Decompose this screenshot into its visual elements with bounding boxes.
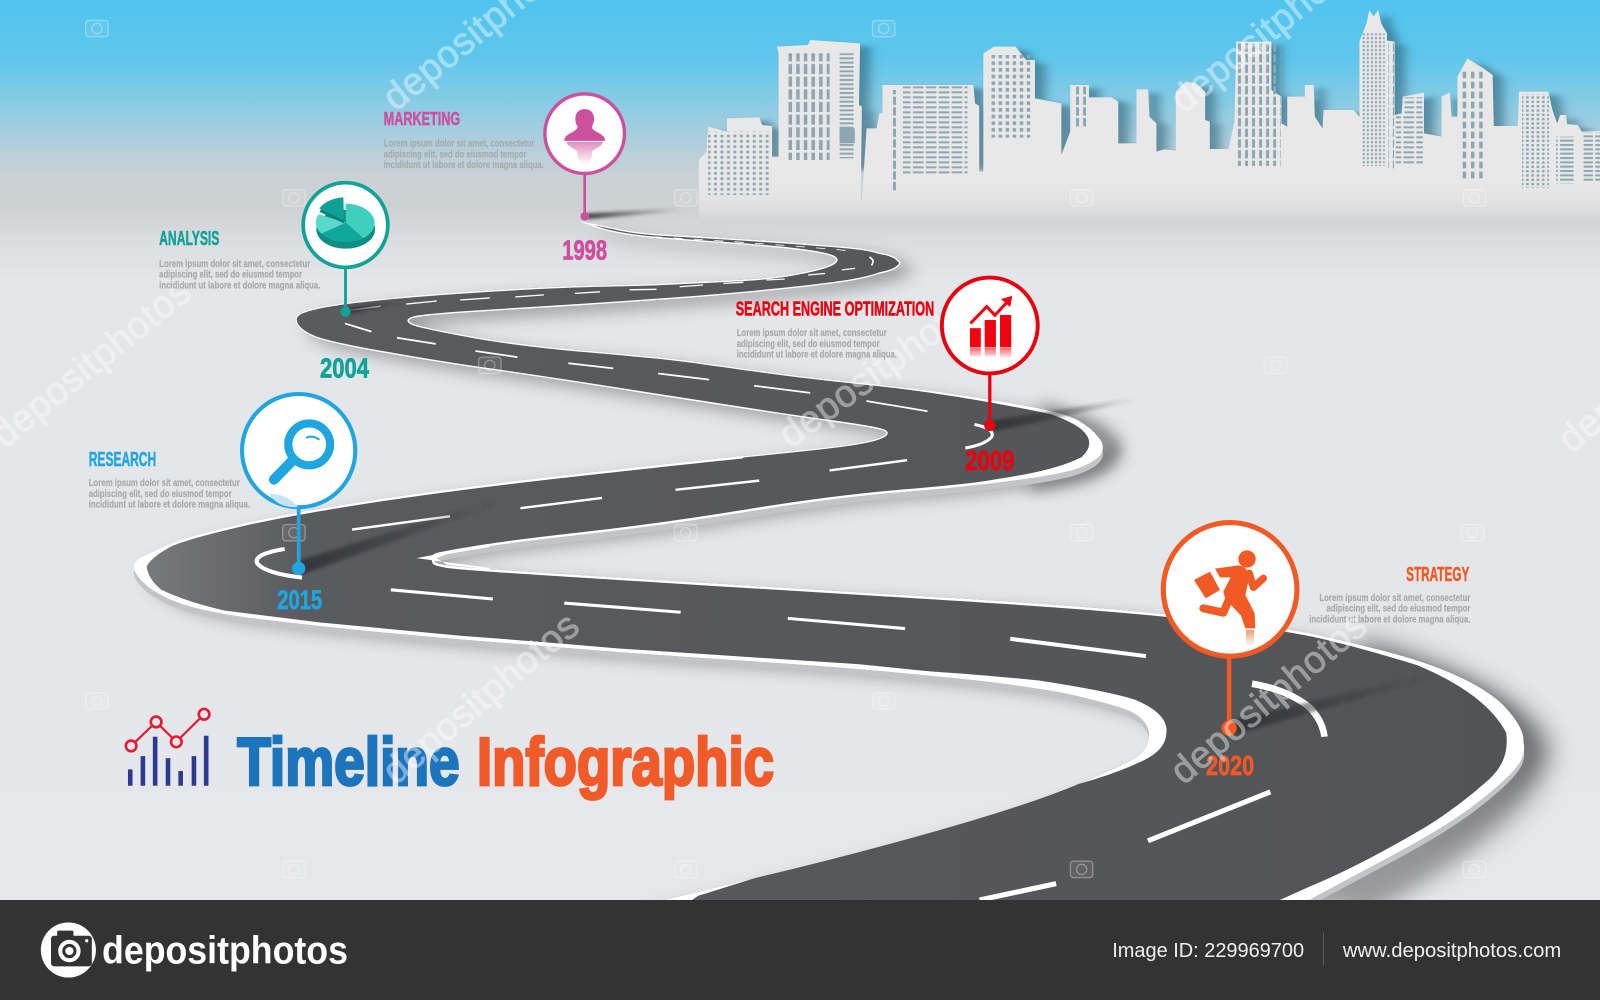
year: 2004 [320,353,370,384]
heading: SEARCH ENGINE OPTIMIZATION [736,299,934,321]
road white edge lines [102,221,1592,918]
watermark over title: depositphotos [374,603,587,792]
body text: adipiscing elit, sed do eiusmod tempor [89,489,232,500]
milestone: Research 2015 [89,394,355,615]
body text: incididunt ut labore et dolore magna aliqua. [737,350,897,361]
body text [89,478,250,511]
body text: adipiscing elit, sed do eiusmod tempor [384,150,527,161]
body text: adipiscing elit, sed do eiusmod tempor [737,339,880,350]
watermarks: depositphotos [771,279,992,455]
body text [1309,593,1471,625]
body text: incididunt ut labore et dolore magna aliqua. [1309,614,1471,625]
watermark over road bend: depositphotos [1162,603,1375,792]
body text: incididunt ut labore et dolore magna aliqua. [159,280,321,291]
heading: ANALYSIS [159,228,219,250]
body text: incididunt ut labore et dolore magna aliqua. [89,500,250,511]
title text: Timeline [237,725,460,800]
skyline silhouette [699,10,1600,223]
year: 2015 [277,585,322,615]
winding road [102,221,1592,918]
year: 2009 [965,445,1014,476]
logo wordmark: depositphotos [102,929,348,972]
year: 2020 [1206,750,1254,781]
road side wall [134,451,1524,900]
milestone: Search Engine Optimization 2009 [736,278,1038,476]
pin [942,278,1038,431]
footer bar [0,900,1600,1000]
milestone: Analysis 2004 [159,183,388,384]
white crescent: far left bend [134,534,266,620]
year: 1998 [562,235,607,266]
icon: 3D pie chart [316,197,375,249]
white crescent: far right bend [1280,630,1524,900]
milestone: Strategy 2020 [1163,523,1471,781]
city skyline [699,10,1600,223]
body text: adipiscing elit, sed do eiusmod tempor [159,270,302,281]
icon: bars and trend line [126,709,209,786]
title text: Infographic [477,725,774,800]
title block [126,709,774,800]
road shadow [146,228,1539,917]
skyline windows [708,33,1600,195]
camera watermark icons [86,20,1486,878]
heading: STRATEGY [1406,564,1470,586]
image id: Image ID: 229969700 [1112,940,1304,962]
body text: adipiscing elit, sed do eiusmod tempor [1327,604,1470,615]
icon: rising bar chart [967,296,1013,359]
icon: running businessman [1194,550,1263,646]
milestone: Marketing 1998 [384,94,624,266]
body text: incididunt ut labore et dolore magna aliqua. [384,160,544,171]
icon: magnifying glass [269,423,330,507]
divider [1323,933,1324,965]
body text [737,328,897,361]
watermarks [0,0,1600,460]
white crescent: right hairpin [900,388,1103,491]
pin [1163,523,1297,736]
heading: RESEARCH [89,449,156,471]
pin [242,394,355,575]
pin [545,94,624,221]
website: www.depositphotos.com [1342,940,1561,962]
body text: Lorem ipsum dolor sit amet, consectetur [737,328,887,339]
road surface [134,221,1524,910]
body text: Lorem ipsum dolor sit amet, consectetur [159,259,310,270]
title text [237,725,774,800]
pin cast shadows [300,208,1429,735]
white wedge at inner bend [416,544,490,569]
white crescent: lower inner bend [665,670,1167,900]
icon: stamp person [564,109,605,165]
logo: camera badge [41,922,96,978]
body text [159,259,321,291]
body text: Lorem ipsum dolor sit amet, consectetur [384,138,535,149]
body text [384,138,544,171]
body text: Lorem ipsum dolor sit amet, consectetur [1319,593,1470,604]
pin [303,183,388,317]
heading: MARKETING [384,108,460,129]
lane dashes [257,237,1324,900]
body text: Lorem ipsum dolor sit amet, consectetur [89,478,240,489]
